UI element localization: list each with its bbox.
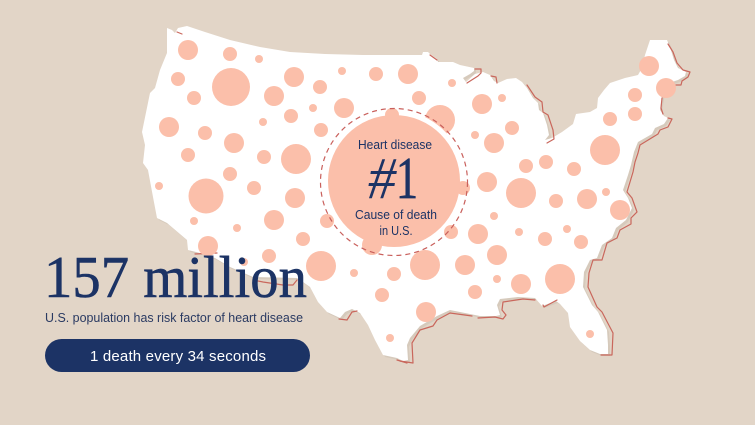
callout: number one cause of death: 1 — [396, 145, 418, 211]
headline: 157 million: 157 million — [44, 244, 307, 310]
map of the United States — [142, 26, 686, 361]
subtitle: U.S. population has risk factor of heart disease — [45, 310, 303, 325]
pill: death rate — [45, 339, 310, 372]
map shadow — [144, 28, 688, 363]
callout: number one cause of death: Heart disease — [358, 137, 432, 152]
callout: number one cause of death: in U.S. — [380, 223, 412, 238]
coastline red outline — [177, 32, 690, 363]
callout: number one cause of death: Cause of death — [355, 207, 437, 222]
callout: number one cause of death: # — [368, 145, 397, 211]
callout: number one cause of death — [320, 108, 470, 256]
population dots — [155, 40, 676, 342]
pill: death rate: 1 death every 34 seconds — [90, 348, 266, 365]
